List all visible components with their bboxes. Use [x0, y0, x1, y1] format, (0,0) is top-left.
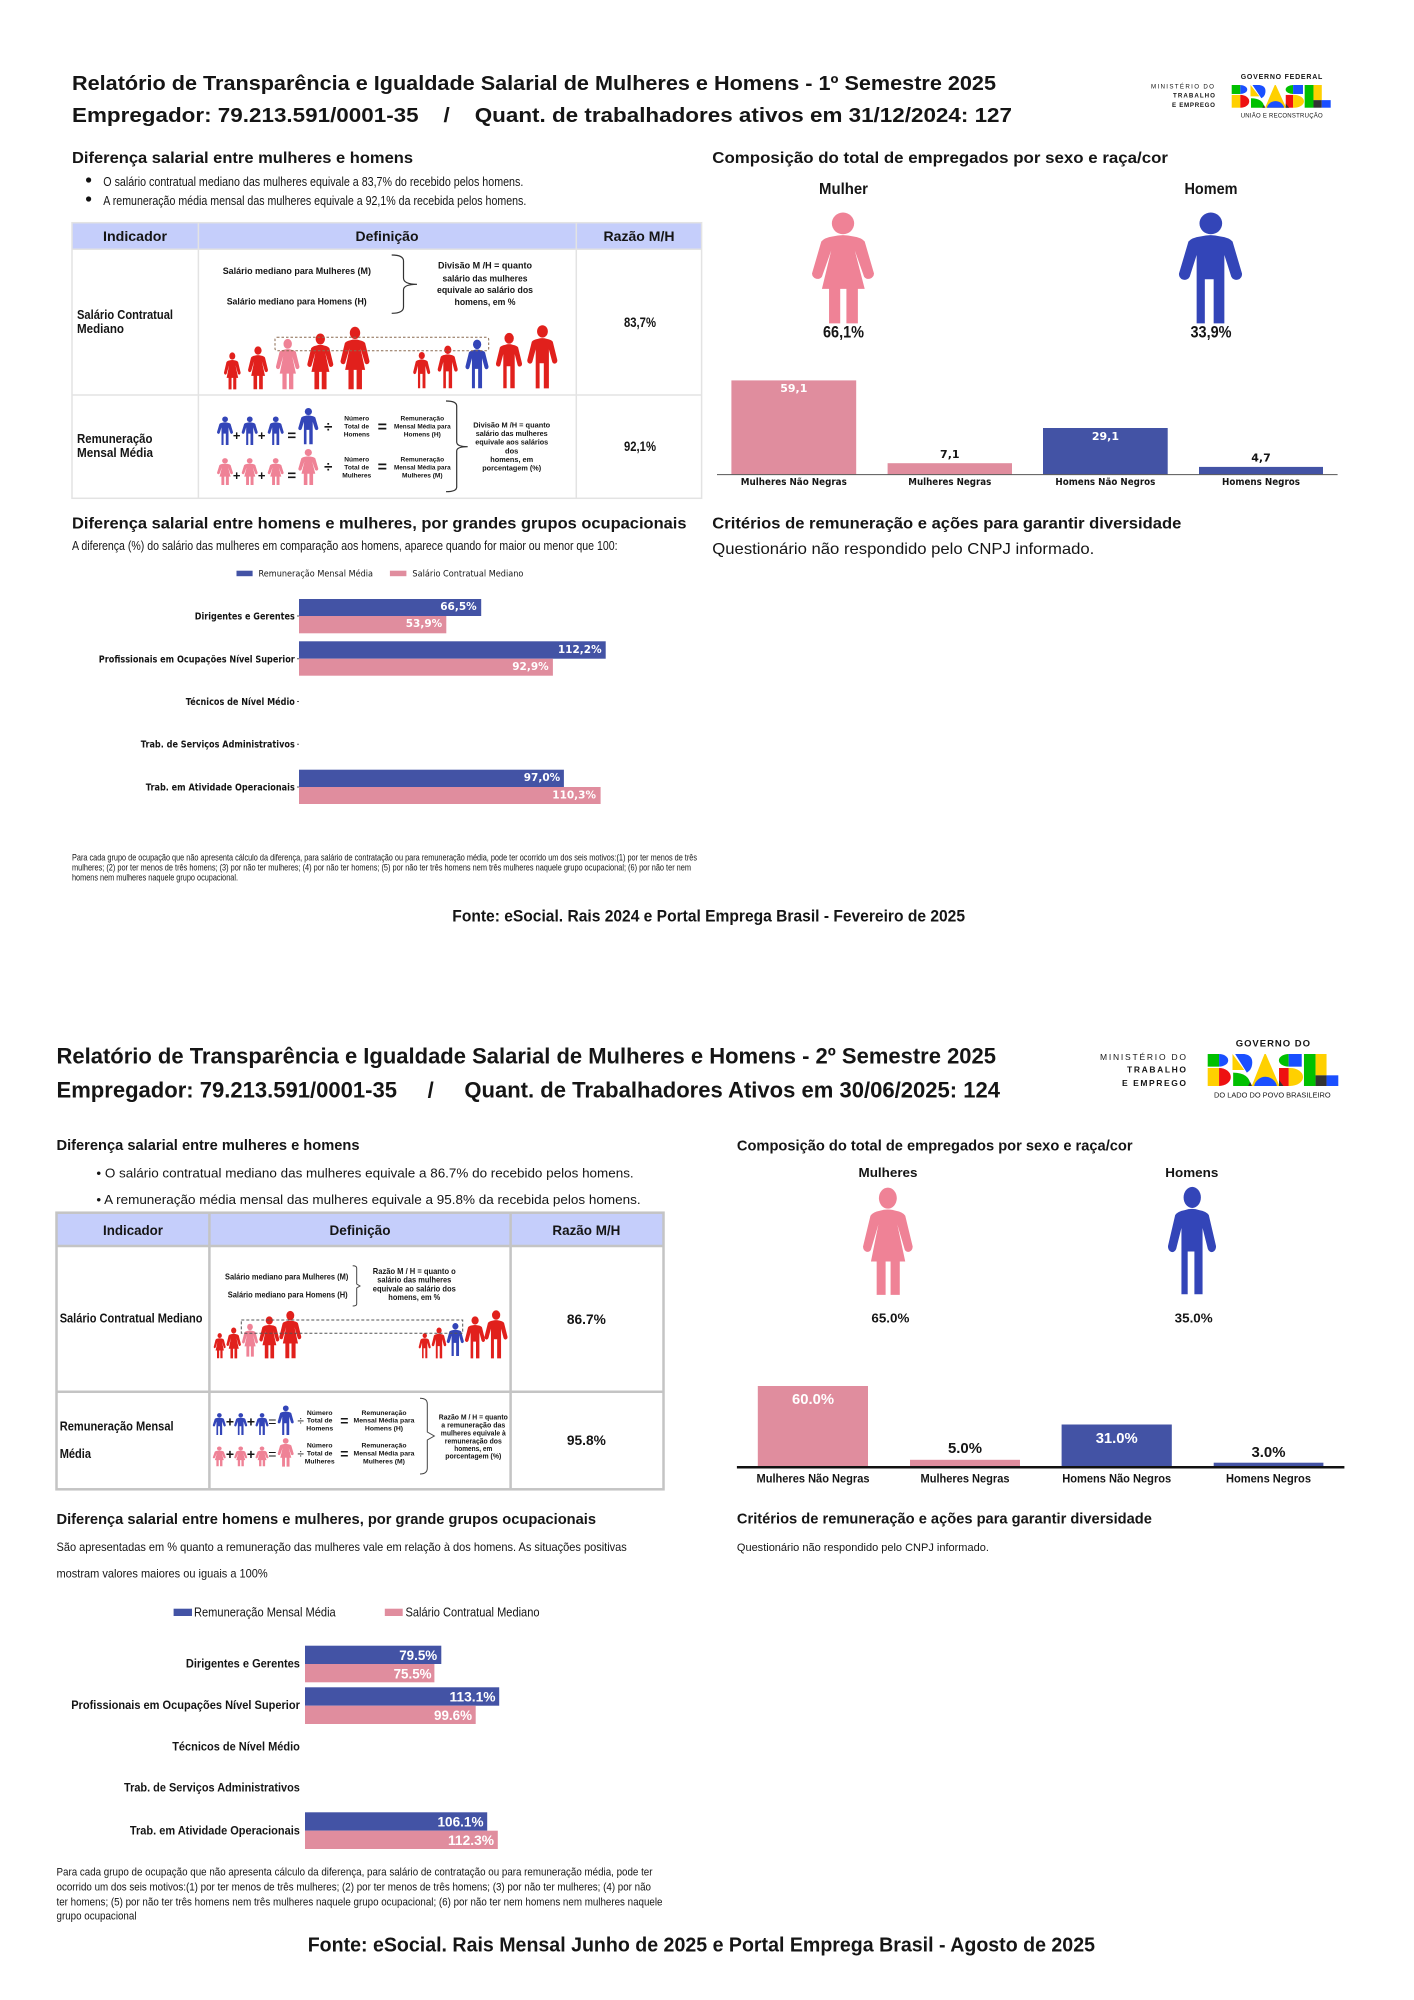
icon: equation women: ÷: [324, 458, 332, 476]
row: remuneração mensal média: homens, em: [454, 1444, 493, 1453]
row: remuneração mensal média: Mensal Média: [77, 445, 154, 460]
heading: diferença salarial entre mulheres e homens: Diferença salarial entre mulheres e homens: [56, 1137, 360, 1154]
footnote: homens nem mulheres naquele grupo ocupacional.: [72, 872, 238, 883]
row: salário contratual mediano: equivale ao salário dos: [437, 285, 533, 296]
icon: equation men: +: [226, 1414, 234, 1430]
legend: [236, 568, 524, 580]
icon: equation men: [217, 408, 387, 445]
bar chart: grupos ocupacionais: 53,9%: [406, 618, 443, 630]
row: salário contratual mediano: 86.7%: [567, 1311, 606, 1327]
panel: relatório 2º semestre 2025: [56, 1039, 1344, 1957]
row: remuneração mensal média: Remuneração: [77, 431, 153, 446]
icon: row of women: [214, 1311, 301, 1358]
row: remuneração mensal média: Total de: [344, 464, 369, 471]
logo: ministério e governo federal: GOVERNO FEDERAL: [1241, 74, 1323, 81]
row: salário contratual mediano: [77, 255, 656, 389]
bar chart: composição por raça/cor: 5.0%: [948, 1440, 982, 1457]
legend: Salário Contratual Mediano: [412, 570, 524, 580]
table header: Definição: [356, 228, 418, 244]
logo: ministério e governo do brasil: DO LADO DO POVO BRASILEIRO: [1214, 1090, 1331, 1099]
text: questionário: Questionário não respondido pelo CNPJ informado.: [712, 541, 1094, 558]
bullet list: resumo salarial: [86, 174, 526, 208]
bar chart: grupos ocupacionais: Dirigentes e Gerentes: [195, 611, 295, 622]
logo: ministério e governo do brasil: [1100, 1039, 1338, 1099]
bar chart: grupos ocupacionais: 92,9%: [512, 661, 549, 673]
heading: composição: Composição do total de empregados por sexo e raça/cor: [712, 150, 1168, 167]
row: remuneração mensal média: mulheres equivale à: [441, 1428, 507, 1437]
bar chart: composição por raça/cor: 60.0%: [792, 1391, 834, 1408]
title: relatório 1º semestre: Relatório de Transparência e Igualdade Salarial de Mulheres e Homens - 1º Semestre 2025: [72, 72, 996, 95]
icon: equation women: =: [287, 468, 296, 484]
bar chart: grupos ocupacionais: Trab. de Serviços Administrativos: [124, 1781, 300, 1795]
logo: ministério e governo do brasil: E EMPREGO: [1122, 1078, 1186, 1088]
row: remuneração mensal média: 92,1%: [624, 438, 656, 454]
row: remuneração mensal média: Número: [344, 456, 369, 463]
table header: Indicador: [103, 1222, 164, 1238]
heading: composição: Composição do total de empregados por sexo e raça/cor: [737, 1137, 1133, 1154]
legend: Remuneração Mensal Média: [194, 1605, 336, 1619]
icon: equation men: ÷: [297, 1414, 304, 1428]
icon: equation women: [217, 449, 387, 485]
bar chart: composição por raça/cor: Homens Não Negros: [1062, 1472, 1171, 1486]
footnote: ocorrido um dos seis motivos:(1) por ter menos de três mulheres; (2) por ter menos de três homens; (3) por não ter mulheres; (4) por não: [56, 1881, 651, 1893]
bar chart: grupos ocupacionais: Técnicos de Nível Médio: [186, 697, 295, 708]
logo: ministério e governo federal: TRABALHO: [1173, 93, 1215, 100]
panel: relatório 1º semestre 2025: [72, 72, 1338, 926]
icon: equation women: +: [233, 468, 241, 483]
text: explicação do gráfico: mostram valores maiores ou iguais a 100%: [56, 1567, 268, 1581]
logo: ministério e governo do brasil: MINISTÉRIO DO: [1100, 1052, 1186, 1062]
row: remuneração mensal média: Remuneração: [400, 416, 444, 423]
row: salário contratual mediano: salário das mulheres: [442, 274, 528, 285]
bar chart: grupos ocupacionais: Técnicos de Nível Médio: [172, 1739, 300, 1753]
row: salário contratual mediano: salário das mulheres: [377, 1275, 452, 1285]
legend: Salário Contratual Mediano: [406, 1605, 540, 1619]
row: remuneração mensal média: Total de: [307, 1451, 333, 1458]
row: remuneração mensal média: Homens (H): [365, 1426, 403, 1433]
row: remuneração mensal média: Homens: [306, 1426, 333, 1433]
icon: row of women: [224, 327, 370, 389]
icon: homens 35.0%: Homens: [1165, 1165, 1218, 1180]
text: explicação do gráfico: São apresentadas em % quanto a remuneração das mulheres vale em relação à dos homens. As situações positivas: [56, 1540, 627, 1554]
row: remuneração mensal média: Remuneração: [400, 456, 444, 463]
row: remuneração mensal média: Mulheres: [342, 472, 372, 479]
icon: equation women: =: [378, 459, 387, 476]
row: remuneração mensal média: Mulheres (M): [363, 1458, 405, 1465]
table header: [103, 1222, 620, 1238]
source: Fonte: eSocial. Rais 2024 e Portal Emprega Brasil - Fevereiro de 2025: [452, 907, 965, 926]
legend: Remuneração Mensal Média: [258, 568, 373, 580]
icon: row of men: [419, 1310, 508, 1358]
bar chart: grupos ocupacionais: Trab. de Serviços Administrativos: [141, 740, 295, 751]
bar chart: grupos ocupacionais: [71, 1646, 499, 1849]
row: remuneração mensal média: 95.8%: [567, 1432, 606, 1448]
row: remuneração mensal média: Total de: [344, 424, 369, 431]
bar chart: grupos ocupacionais: 110,3%: [552, 789, 596, 801]
logo: ministério e governo federal: MINISTÉRIO DO: [1151, 84, 1215, 91]
icon: equation women: =: [268, 1446, 276, 1462]
row: salário contratual mediano: Mediano: [77, 321, 124, 336]
title: relatório 2º semestre: Relatório de Transparência e Igualdade Salarial de Mulheres e Homens - 2º Semestre 2025: [56, 1043, 996, 1068]
footnote: [56, 1866, 662, 1922]
row: salário contratual mediano: Salário mediano para Homens (H): [227, 297, 367, 308]
row: remuneração mensal média: Média: [60, 1446, 92, 1461]
table header: Definição: [330, 1222, 390, 1238]
bullet list: resumo salarial: • A remuneração média mensal das mulheres equivale a 95.8% da recebida pelos homens.: [96, 1192, 641, 1207]
icon: row of men: [413, 325, 557, 388]
icon: mulher 66,1%: Mulher: [819, 181, 868, 198]
title: relatório 1º semestre: Empregador: 79.213.591/0001-35 / Quant. de trabalhadores ativos em 31/12/2024: 127: [72, 104, 1012, 127]
row: salário contratual mediano: 83,7%: [624, 314, 656, 330]
icon: equation men: =: [287, 428, 296, 444]
bar chart: grupos ocupacionais: 75.5%: [394, 1666, 432, 1682]
row: salário contratual mediano: Razão M / H = quanto o: [373, 1266, 456, 1276]
row: remuneração mensal média: salário das mulheres: [476, 429, 548, 438]
bar chart: grupos ocupacionais: 97,0%: [524, 772, 561, 784]
row: salário contratual mediano: Salário Contratual: [77, 307, 173, 322]
icon: mulheres 65.0%: Mulheres: [858, 1165, 918, 1180]
table header: [103, 228, 674, 244]
icon: mulheres 65.0%: [858, 1165, 918, 1326]
row: salário contratual mediano: equivale ao salário dos: [373, 1283, 456, 1293]
icon: equation women: +: [226, 1446, 234, 1462]
bar chart: grupos ocupacionais: 106.1%: [438, 1814, 484, 1830]
bar chart: composição por raça/cor: [717, 380, 1338, 488]
text: questionário: Questionário não respondido pelo CNPJ informado.: [737, 1542, 989, 1554]
row: salário contratual mediano: homens, em %: [454, 297, 516, 308]
footnote: grupo ocupacional: [56, 1910, 136, 1922]
icon: mulher 66,1%: [812, 181, 874, 341]
bar chart: grupos ocupacionais: 112.3%: [448, 1832, 495, 1848]
row: salário contratual mediano: Salário mediano para Homens (H): [228, 1289, 348, 1299]
row: remuneração mensal média: remuneração dos: [445, 1436, 502, 1445]
legend: [174, 1605, 540, 1619]
row: remuneração mensal média: homens, em: [490, 455, 534, 464]
logo: ministério e governo do brasil: TRABALHO: [1127, 1065, 1186, 1075]
row: remuneração mensal média: Homens: [344, 432, 370, 439]
icon: mulheres 65.0%: 65.0%: [871, 1311, 910, 1326]
row: remuneração mensal média: porcentagem (%): [445, 1452, 502, 1461]
bar chart: composição por raça/cor: Homens Não Negros: [1055, 477, 1156, 488]
icon: homem 33,9%: [1179, 181, 1242, 341]
row: remuneração mensal média: Mensal Média para: [354, 1418, 415, 1425]
row: remuneração mensal média: Divisão M /H = quanto: [473, 420, 551, 429]
icon: equation men: =: [268, 1414, 276, 1430]
icon: homens 35.0%: [1165, 1165, 1218, 1326]
icon: equation men: ÷: [324, 418, 332, 436]
source: Fonte: eSocial. Rais Mensal Junho de 2025 e Portal Emprega Brasil - Agosto de 2025: [308, 1935, 1095, 1957]
bar chart: composição por raça/cor: Mulheres Negras: [908, 477, 992, 488]
footnote: ter homens; (5) por não ter três homens nem três mulheres naquele grupo ocupacional; (6) por não ter nem homens nem mulheres naquele: [56, 1896, 662, 1908]
row: salário contratual mediano: Salário mediano para Mulheres (M): [223, 266, 371, 277]
icon: equation men: +: [233, 428, 241, 443]
row: remuneração mensal média: Remuneração Mensal: [60, 1419, 174, 1434]
footnote: Para cada grupo de ocupação que não apresenta cálculo da diferença, para salário de contratação ou para remuneração média, pode ter ocorrido um dos seis motivos:(1) por ter menos de três: [72, 853, 697, 864]
icon: equation men: +: [258, 428, 266, 443]
bar chart: grupos ocupacionais: 112,2%: [558, 644, 602, 656]
icon: mulher 66,1%: 66,1%: [823, 322, 864, 341]
row: salário contratual mediano: Salário mediano para Mulheres (M): [225, 1271, 348, 1281]
bar chart: composição por raça/cor: 3.0%: [1252, 1444, 1286, 1461]
bar chart: composição por raça/cor: [737, 1386, 1344, 1486]
bar chart: grupos ocupacionais: Profissionais em Ocupações Nível Superior: [99, 654, 295, 665]
row: remuneração mensal média: Remuneração: [362, 1443, 406, 1450]
bullet list: resumo salarial: A remuneração média mensal das mulheres equivale a 92,1% da recebida pelos homens.: [103, 193, 526, 208]
row: remuneração mensal média: Mulheres (M): [402, 472, 443, 479]
icon: equation women: [213, 1438, 348, 1467]
icon: equation women: +: [247, 1446, 255, 1462]
bar chart: composição por raça/cor: 7,1: [940, 448, 960, 461]
icon: equation women: ÷: [297, 1447, 304, 1461]
bar chart: composição por raça/cor: Mulheres Negras: [920, 1472, 1010, 1486]
bar chart: grupos ocupacionais: 99.6%: [434, 1707, 473, 1723]
bar chart: grupos ocupacionais: 66,5%: [440, 601, 477, 613]
row: remuneração mensal média: [77, 401, 656, 492]
critérios heading: Critérios de remuneração e ações para garantir diversidade: [737, 1510, 1152, 1527]
row: remuneração mensal média: Homens (H): [404, 432, 441, 439]
heading: diferença salarial entre mulheres e homens: Diferença salarial entre mulheres e homens: [72, 150, 413, 167]
bar chart: grupos ocupacionais: 79.5%: [399, 1647, 438, 1663]
bar chart: composição por raça/cor: Homens Negros: [1222, 477, 1300, 488]
bar chart: composição por raça/cor: Homens Negros: [1226, 1472, 1311, 1486]
bar chart: grupos ocupacionais: 113.1%: [450, 1688, 496, 1704]
row: remuneração mensal média: Mensal Média para: [394, 464, 451, 471]
bar chart: grupos ocupacionais: Trab. em Atividade Operacionais: [146, 782, 295, 793]
row: remuneração mensal média: equivale aos salários: [475, 438, 548, 447]
bar chart: grupos ocupacionais: Trab. em Atividade Operacionais: [130, 1823, 300, 1837]
bar chart: composição por raça/cor: 4,7: [1251, 452, 1271, 464]
row: remuneração mensal média: a remuneração das: [441, 1420, 505, 1429]
heading: diferença por grande grupos ocupacionais: Diferença salarial entre homens e mulheres, por grande grupos ocupacionais: [56, 1511, 596, 1528]
row: remuneração mensal média: Mensal Média para: [394, 424, 451, 431]
icon: homens 35.0%: 35.0%: [1175, 1311, 1213, 1326]
row: salário contratual mediano: homens, em %: [388, 1292, 441, 1302]
footnote: Para cada grupo de ocupação que não apresenta cálculo da diferença, para salário de contratação ou para remuneração média, pode ter: [56, 1866, 653, 1878]
bullet list: resumo salarial: • O salário contratual mediano das mulheres equivale a 86.7% do recebido pelos homens.: [96, 1165, 634, 1180]
icon: equation men: +: [247, 1414, 255, 1430]
table header: Razão M/H: [552, 1222, 620, 1238]
row: salário contratual mediano: [60, 1266, 606, 1358]
logo: ministério e governo federal: UNIÃO E RECONSTRUÇÃO: [1241, 112, 1323, 119]
icon: equation women: =: [340, 1446, 348, 1462]
bar chart: composição por raça/cor: Mulheres Não Negras: [756, 1472, 870, 1486]
title: relatório 1º semestre: [72, 72, 1012, 127]
row: remuneração mensal média: Remuneração: [362, 1410, 406, 1417]
text: explicação do gráfico: A diferença (%) do salário das mulheres em comparação aos homens, aparece quando for maior ou menor que 100:: [72, 538, 618, 553]
row: remuneração mensal média: Razão M / H = quanto: [439, 1412, 508, 1421]
table: indicadores: [72, 223, 702, 498]
logo: ministério e governo federal: [1151, 74, 1331, 119]
row: remuneração mensal média: dos: [505, 446, 518, 455]
heading: diferença por grandes grupos ocupacionais: Diferença salarial entre homens e mulheres, por grandes grupos ocupacionais: [72, 515, 686, 532]
bullet list: resumo salarial: O salário contratual mediano das mulheres equivale a 83,7% do recebido pelos homens.: [103, 174, 523, 189]
logo: ministério e governo do brasil: GOVERNO DO: [1236, 1039, 1310, 1050]
table header: Razão M/H: [604, 228, 674, 244]
bar chart: composição por raça/cor: 29,1: [1092, 430, 1119, 443]
text: explicação do gráfico: [56, 1540, 627, 1581]
row: remuneração mensal média: porcentagem (%): [482, 464, 542, 473]
bar chart: composição por raça/cor: 59,1: [780, 382, 807, 395]
table: indicadores: [56, 1213, 664, 1489]
icon: homem 33,9%: Homem: [1184, 181, 1238, 198]
logo: ministério e governo federal: E EMPREGO: [1172, 102, 1215, 109]
footnote: mulheres; (2) por ter menos de três homens; (3) por não ter mulheres; (4) por não ter homens; (5) por não ter três homens nem três mulheres naquele grupo ocupacional; (6) por não ter nem: [72, 862, 691, 873]
row: remuneração mensal média: Mensal Média para: [354, 1451, 415, 1458]
bar chart: composição por raça/cor: 31.0%: [1096, 1430, 1138, 1447]
row: remuneração mensal média: Número: [307, 1410, 333, 1417]
bar chart: grupos ocupacionais: Dirigentes e Gerentes: [186, 1656, 300, 1670]
bar chart: composição por raça/cor: Mulheres Não Negras: [741, 477, 847, 488]
row: remuneração mensal média: [60, 1398, 606, 1474]
row: remuneração mensal média: Número: [307, 1443, 333, 1450]
icon: homem 33,9%: 33,9%: [1190, 322, 1232, 341]
icon: equation men: =: [378, 419, 387, 436]
icon: equation women: +: [258, 468, 266, 483]
row: remuneração mensal média: Mulheres: [305, 1458, 335, 1465]
table header: Indicador: [103, 228, 168, 244]
icon: equation men: [213, 1405, 348, 1435]
row: salário contratual mediano: Divisão M /H = quanto: [438, 260, 532, 271]
critérios heading: Critérios de remuneração e ações para garantir diversidade: [712, 515, 1182, 532]
icon: equation men: =: [340, 1412, 348, 1428]
footnote: [72, 853, 697, 883]
row: remuneração mensal média: Total de: [307, 1418, 333, 1425]
row: remuneração mensal média: Número: [344, 416, 369, 423]
title: relatório 2º semestre: Empregador: 79.213.591/0001-35 / Quant. de Trabalhadores Ativos em 30/06/2025: 124: [56, 1078, 1000, 1103]
bar chart: grupos ocupacionais: Profissionais em Ocupações Nível Superior: [71, 1698, 300, 1712]
title: relatório 2º semestre: [56, 1043, 1000, 1103]
bullet list: resumo salarial: [96, 1165, 641, 1207]
row: salário contratual mediano: Salário Contratual Mediano: [60, 1311, 203, 1326]
bar chart: grupos ocupacionais: [99, 599, 606, 804]
